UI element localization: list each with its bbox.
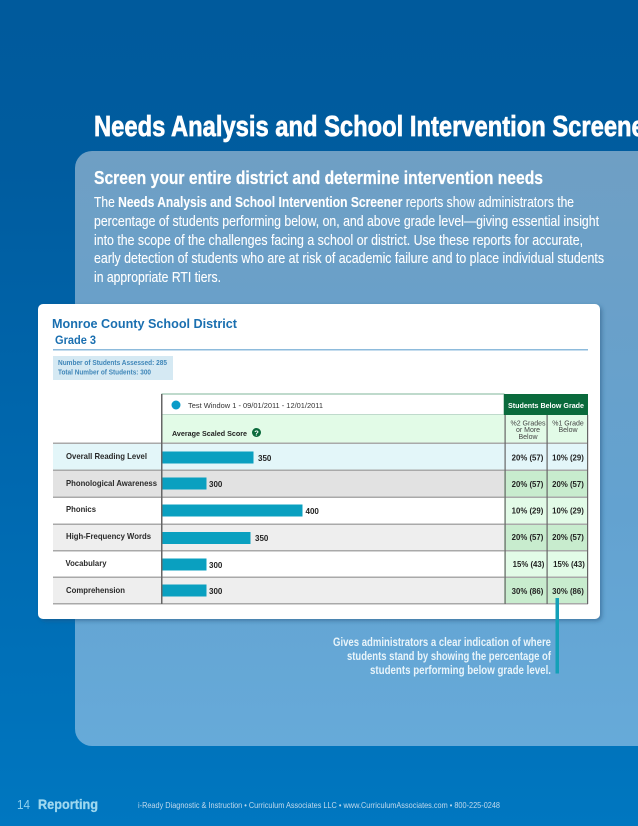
percentage columns: 20% (57) — [552, 480, 584, 489]
student count box: Number of Students Assessed: 285 — [58, 360, 167, 367]
panel: description background — [75, 151, 638, 746]
table header: %2 Grades — [510, 420, 546, 428]
report grade heading: Grade 3 — [55, 335, 96, 347]
table header: Students Below Grade — [508, 401, 584, 410]
bar chart: average scaled score — [162, 452, 319, 596]
table header: Test Window 1 - 09/01/2011 - 12/01/2011 — [188, 401, 323, 410]
table header — [162, 394, 588, 443]
body text block — [94, 195, 604, 286]
percentage columns: 30% (86) — [552, 587, 584, 596]
report district heading: Monroe County School District — [52, 316, 238, 331]
row labels: High-Frequency Words — [66, 531, 151, 541]
icon: test window dot — [172, 400, 180, 410]
student count box: Total Number of Students: 300 — [58, 370, 151, 376]
body text block: The Needs Analysis and School Intervention Screener reports show administrators the — [94, 195, 574, 211]
percentage columns: 20% (57) — [512, 533, 544, 542]
icon: help badge — [252, 428, 261, 438]
callout text: students stand by showing the percentage of — [347, 649, 552, 663]
callout text: students performing below grade level. — [370, 663, 551, 677]
row labels: Overall Reading Level — [66, 451, 147, 461]
student count box — [53, 356, 173, 380]
table header: or More — [516, 427, 540, 434]
percentage columns: 10% (29) — [552, 454, 584, 462]
callout text: Gives administrators a clear indication of where — [333, 635, 551, 649]
table header: %1 Grade — [552, 420, 584, 428]
callout text — [333, 635, 552, 677]
footer page number: 14 — [17, 797, 30, 812]
percentage columns: 30% (86) — [512, 587, 544, 596]
bar chart: average scaled score: 300 — [209, 587, 223, 596]
percentage columns: 15% (43) — [553, 560, 585, 569]
bar chart: average scaled score: 350 — [255, 534, 269, 543]
bar chart: average scaled score: 400 — [306, 507, 319, 516]
icon: help badge: ? — [254, 428, 259, 438]
callout line — [556, 598, 559, 674]
footer credits: i-Ready Diagnostic & Instruction • Curriculum Associates LLC • www.CurriculumAssociates.com • 800-225-0248 — [138, 800, 500, 810]
percentage columns: 15% (43) — [513, 560, 545, 569]
body text block: in appropriate RTI tiers. — [94, 270, 221, 286]
panel: report card — [17, 304, 600, 812]
percentage columns: 20% (57) — [552, 533, 584, 542]
percentage columns: 10% (29) — [552, 506, 584, 516]
percentage columns: 10% (29) — [512, 506, 544, 516]
table header: Average Scaled Score — [172, 429, 247, 438]
bar chart: average scaled score: 300 — [209, 561, 223, 570]
row labels: Phonics — [66, 504, 96, 514]
table header: Below — [518, 434, 538, 441]
table rows — [53, 394, 588, 604]
row labels: Phonological Awareness — [66, 478, 157, 488]
bar chart: average scaled score: 300 — [209, 480, 223, 489]
percentage columns: 20% (57) — [512, 480, 544, 489]
row labels: Comprehension — [66, 585, 125, 595]
row labels: Vocabulary — [66, 558, 107, 568]
table header: Below — [558, 427, 578, 434]
bar chart: average scaled score: 350 — [258, 454, 272, 463]
percentage columns — [512, 454, 585, 596]
subheading: Screen your entire district and determine intervention needs — [94, 167, 543, 188]
footer section name: Reporting — [38, 796, 98, 812]
percentage columns: 20% (57) — [512, 454, 544, 462]
row labels — [66, 451, 157, 595]
